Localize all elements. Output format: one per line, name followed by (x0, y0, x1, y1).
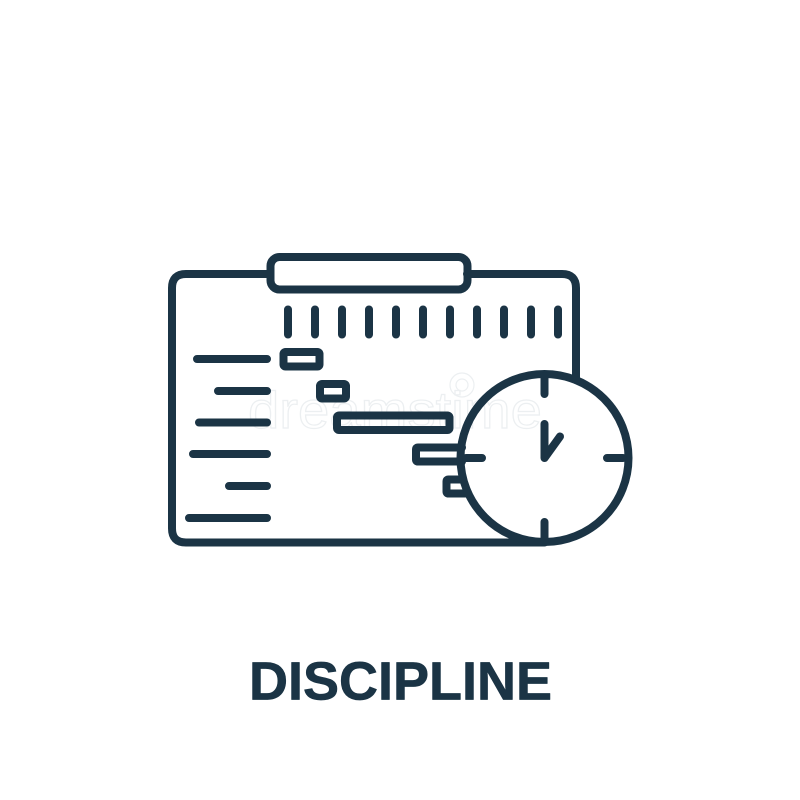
task label lines (189, 359, 267, 518)
title: DISCIPLINE (249, 652, 552, 712)
gantt bar 2 (320, 384, 346, 398)
icon: gantt chart with clock (172, 257, 628, 542)
board header tab (270, 257, 468, 290)
clock hands (544, 424, 560, 458)
chart board outline (172, 274, 576, 542)
clock face (460, 374, 628, 542)
gantt bar 3 (337, 416, 450, 430)
gantt bar 4 (416, 448, 462, 462)
gantt bar 5 (446, 480, 468, 494)
gantt bar 1 (284, 352, 320, 366)
timeline ticks (288, 310, 558, 334)
clock hour marks (466, 376, 623, 540)
clock (460, 374, 628, 542)
watermark: dreamstime (248, 382, 542, 440)
